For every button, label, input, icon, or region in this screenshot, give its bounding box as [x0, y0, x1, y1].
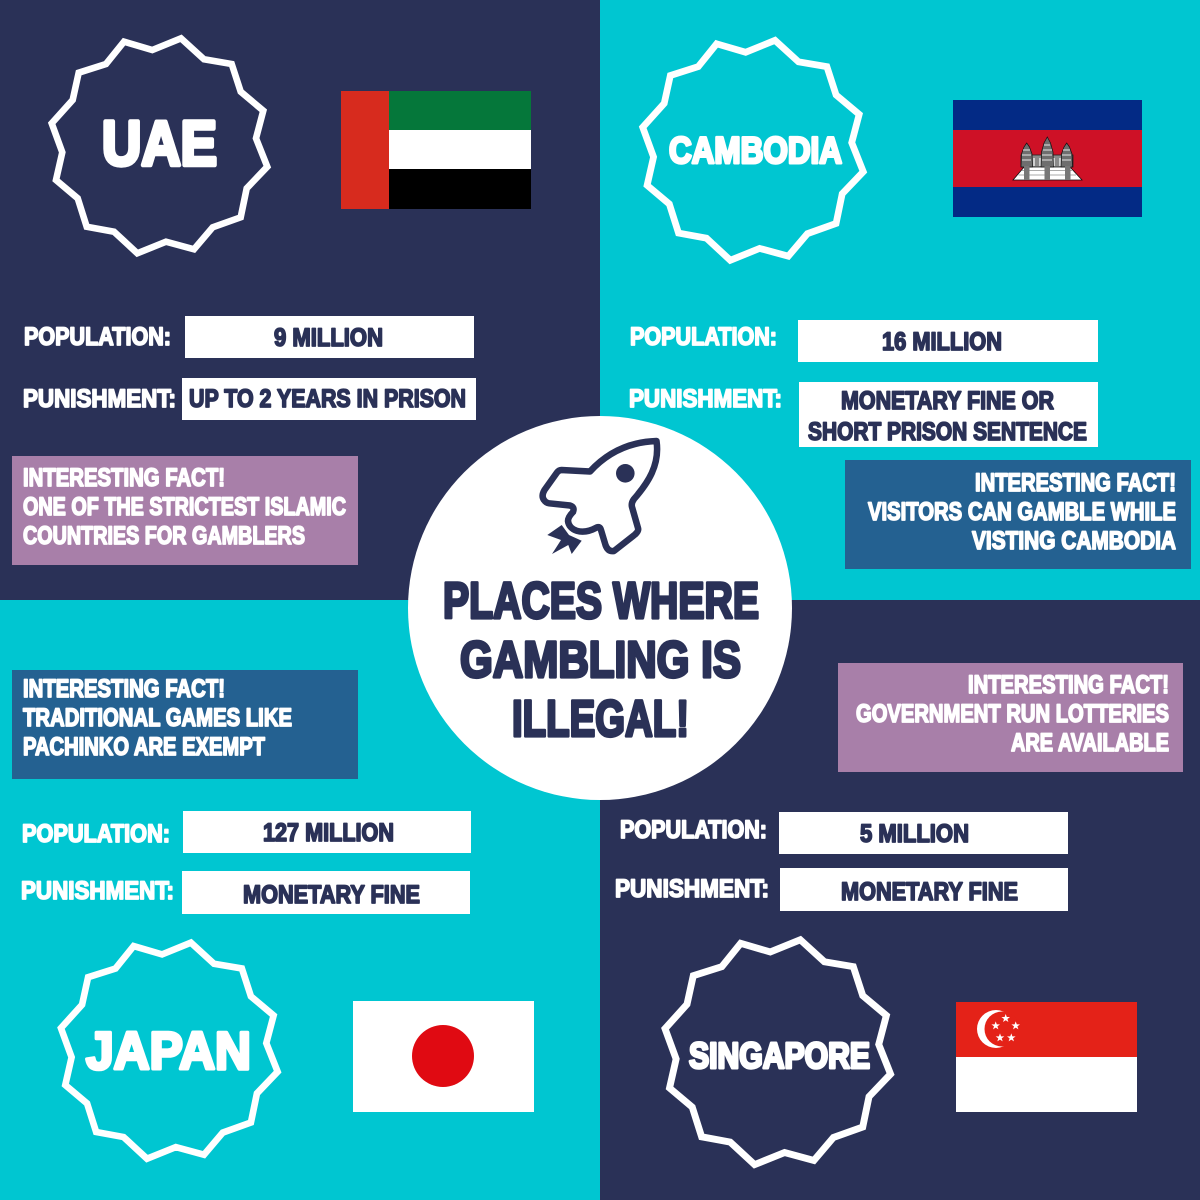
title: GAMBLING IS [460, 631, 741, 688]
fact box: UAE [12, 456, 358, 565]
label: Cambodia punishment: PUNISHMENT: [629, 385, 782, 413]
label: UAE population: POPULATION: [24, 323, 171, 351]
panel: Singapore [600, 600, 1200, 1200]
label: Cambodia population: POPULATION: [630, 323, 777, 351]
title: ILLEGAL! [512, 690, 689, 747]
fact box: Japan: INTERESTING FACT! [23, 675, 225, 703]
value box: Cambodia punishment: MONETARY FINE OR [841, 387, 1054, 415]
badge: Cambodia: CAMBODIA [669, 130, 842, 171]
badge: Singapore: SINGAPORE [689, 1035, 870, 1076]
icon: Angkor Wat temple [1013, 137, 1082, 180]
fact box: UAE: COUNTRIES FOR GAMBLERS [23, 522, 305, 550]
panel background: Japan [0, 600, 600, 1200]
value box: UAE punishment: UP TO 2 YEARS IN PRISON [189, 385, 466, 413]
panel background: Singapore [600, 600, 1200, 1200]
title: PLACES WHERE [443, 572, 759, 629]
label: Singapore punishment: PUNISHMENT: [615, 875, 769, 903]
flag: UAE [341, 91, 531, 209]
flag: Japan [353, 1001, 534, 1112]
title [443, 572, 759, 747]
badge: Japan [61, 943, 278, 1159]
panel background: UAE [0, 0, 600, 600]
fact box: Japan: TRADITIONAL GAMES LIKE [23, 704, 292, 732]
fact box: Japan [12, 670, 358, 779]
fact box: Cambodia [845, 460, 1191, 569]
center circle [408, 416, 792, 800]
badge: UAE [52, 38, 267, 253]
fact box: UAE: ONE OF THE STRICTEST ISLAMIC [23, 493, 346, 521]
fact box: Japan: PACHINKO ARE EXEMPT [23, 733, 265, 761]
value box: Cambodia population [798, 320, 1098, 362]
value box: Japan population: 127 MILLION [263, 819, 394, 847]
badge: Cambodia [643, 40, 863, 260]
fact box: UAE: INTERESTING FACT! [23, 464, 225, 492]
flag: Cambodia [953, 100, 1142, 217]
value box: Cambodia punishment: SHORT PRISON SENTENCE [808, 418, 1087, 446]
value box: Cambodia population: 16 MILLION [882, 328, 1002, 356]
panel: Japan [0, 600, 600, 1200]
value box: Singapore punishment [780, 868, 1068, 911]
value box: Japan punishment: MONETARY FINE [243, 881, 420, 909]
value box: UAE population: 9 MILLION [274, 324, 383, 352]
label: Japan population: POPULATION: [22, 820, 170, 848]
badge: Japan: JAPAN [86, 1022, 251, 1081]
fact box: Singapore [838, 663, 1183, 772]
label: UAE punishment: PUNISHMENT: [23, 385, 176, 413]
panel background: Cambodia [600, 0, 1200, 600]
value box: UAE population [185, 316, 474, 358]
flag: Singapore [956, 1002, 1137, 1112]
value box: UAE punishment [182, 378, 476, 420]
label: Japan punishment: PUNISHMENT: [21, 877, 174, 905]
value box: Japan population [183, 811, 471, 853]
label: Singapore population: POPULATION: [620, 816, 767, 844]
value box: Japan punishment [182, 871, 470, 914]
badge: Singapore [665, 940, 891, 1165]
value box: Singapore punishment: MONETARY FINE [841, 878, 1018, 906]
value box: Cambodia punishment [799, 382, 1098, 447]
panel: UAE [0, 0, 600, 600]
value box: Singapore population: 5 MILLION [860, 820, 969, 848]
icon: rocket [543, 441, 657, 554]
badge: UAE: UAE [102, 109, 217, 179]
panel: Cambodia [600, 0, 1200, 600]
value box: Singapore population [779, 812, 1068, 854]
